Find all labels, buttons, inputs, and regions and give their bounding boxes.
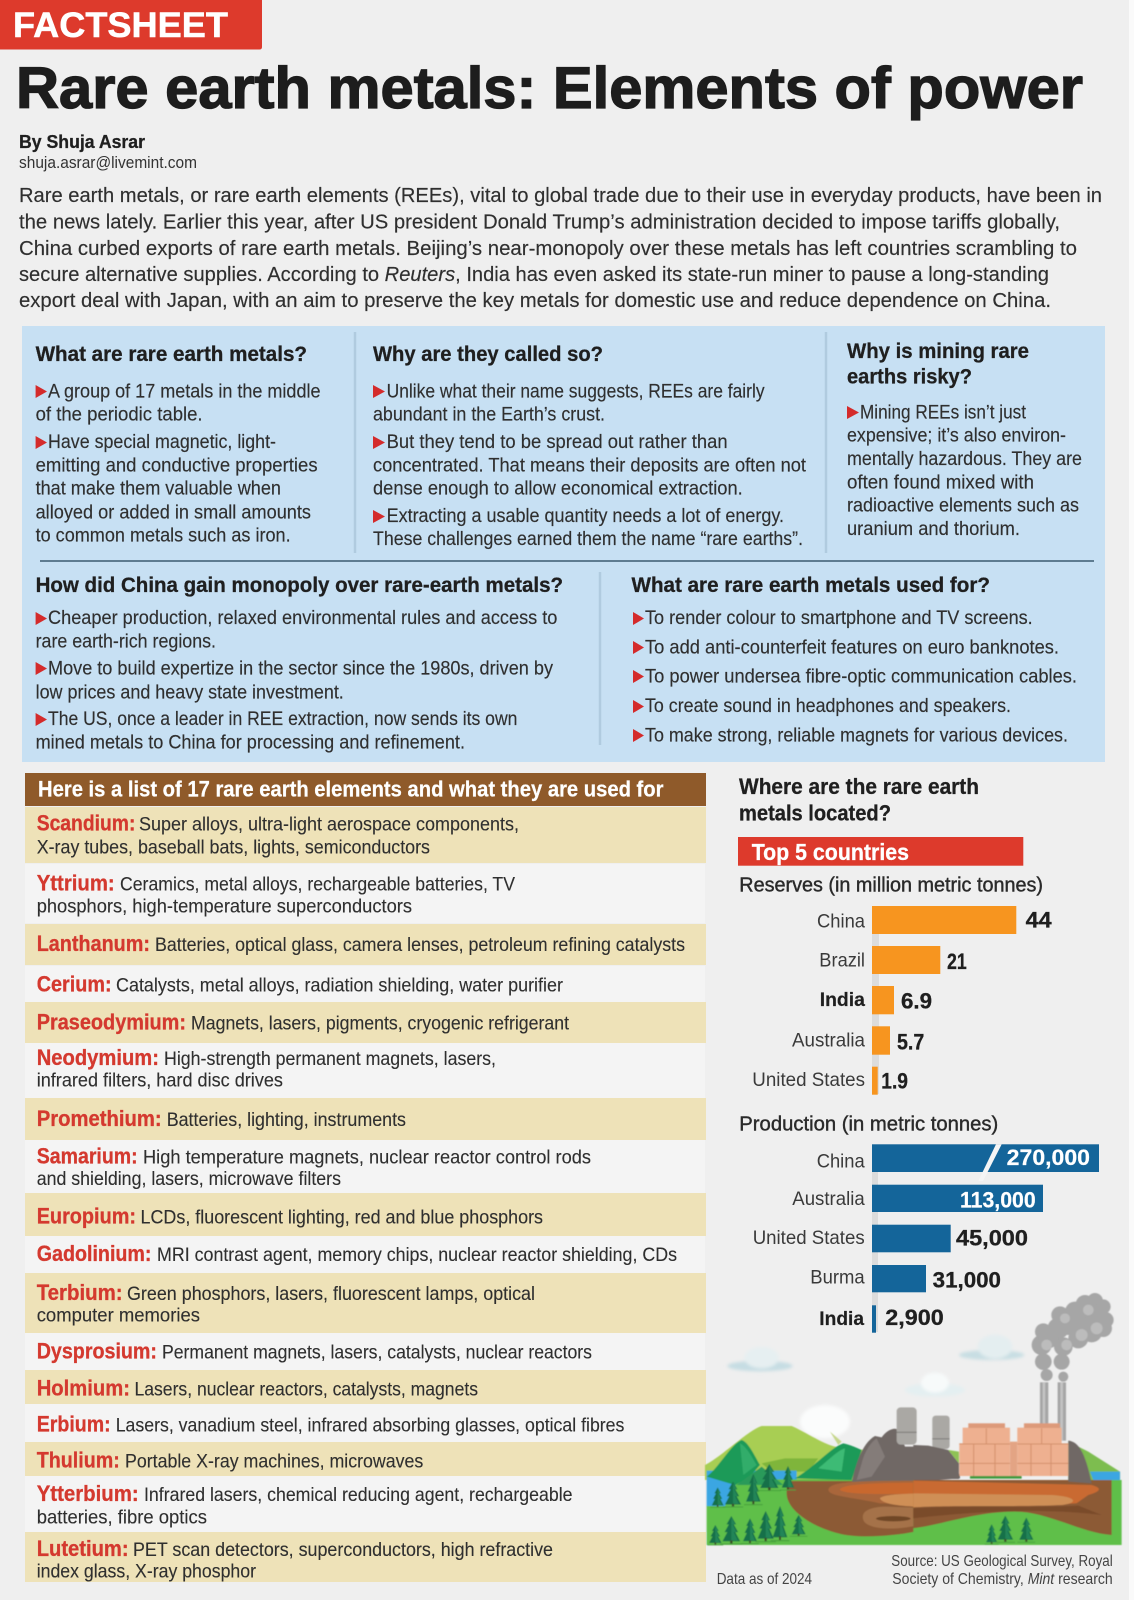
bar chart: reserves: China — [817, 910, 865, 932]
row: Lanthanum: Batteries, optical glass, camera lenses, petroleum refining catalysts — [155, 934, 685, 956]
panel: list of 17 elements — [25, 773, 706, 1583]
panel: why are they called so: dense enough to allow economical extraction. — [373, 478, 743, 500]
row: Promethium: Promethium: — [37, 1106, 162, 1131]
panel: why are they called so: Unlike what their name suggests, REEs are fairly — [387, 380, 765, 402]
bar chart: production: Australia — [792, 1188, 865, 1210]
row: Ytterbium — [25, 1476, 705, 1532]
bar chart: production: 2,900 — [885, 1305, 944, 1330]
table header: Here is a list of 17 rare earth elements and what they are used for — [38, 777, 664, 802]
bar chart: reserves: 1.9 — [881, 1068, 908, 1093]
row: Erbium: Lasers, vanadium steel, infrared absorbing glasses, optical fibres — [116, 1415, 625, 1437]
row: Europium: Europium: — [37, 1203, 136, 1228]
panel: how china gained monopoly — [36, 573, 563, 753]
heading: where are they located — [739, 774, 979, 826]
row: Cerium — [25, 966, 705, 1002]
byline: By Shuja Asrar — [19, 131, 145, 152]
panel: why are they called so: abundant in the Earth’s crust. — [373, 404, 605, 426]
row: Samarium — [25, 1140, 705, 1193]
row: Erbium — [25, 1404, 705, 1442]
silo left — [897, 1407, 917, 1445]
row: Ytterbium: Infrared lasers, chemical reducing agent, rechargeable — [144, 1484, 572, 1506]
panel: how china gained monopoly: The US, once a leader in REE extraction, now sends its own — [48, 708, 517, 730]
note: data year: Data as of 2024 — [717, 1571, 812, 1588]
panel: why is mining risky: mentally hazardous. They are — [847, 448, 1082, 470]
row: Scandium: Scandium: — [37, 811, 135, 836]
bar chart: reserves: United States — [752, 1069, 865, 1091]
row: Thulium: Thulium: — [37, 1447, 120, 1472]
row: Praseodymium — [25, 1002, 706, 1043]
row: Promethium — [25, 1098, 706, 1140]
panel: what are they used for: To create sound in headphones and speakers. — [645, 695, 1011, 717]
row: Dysprosium: Permanent magnets, lasers, catalysts, nuclear reactors — [162, 1341, 592, 1363]
bar chart: reserves — [739, 874, 1052, 1095]
row: Neodymium: High-strength permanent magnets, lasers, — [164, 1048, 496, 1070]
bar chart: reserves: Brazil — [819, 950, 865, 972]
panel: what are rare earth metals: to common metals such as iron. — [36, 525, 291, 547]
row: Gadolinium: Gadolinium: — [37, 1241, 152, 1266]
row: Terbium: computer memories — [37, 1305, 200, 1327]
panel: why is mining risky: earths risky? — [847, 364, 972, 388]
row: Gadolinium — [25, 1236, 705, 1273]
panel: what are rare earth metals: alloyed or added in small amounts — [36, 501, 311, 523]
panel: what are they used for: To render colour to smartphone and TV screens. — [645, 607, 1033, 629]
row: Dysprosium — [25, 1333, 705, 1370]
row: Gadolinium: MRI contrast agent, memory chips, nuclear reactor shielding, CDs — [157, 1244, 677, 1266]
panel: why is mining risky: Mining REEs isn’t just — [860, 401, 1026, 423]
row: Holmium: Lasers, nuclear reactors, catalysts, magnets — [134, 1379, 478, 1401]
row: Yttrium — [25, 864, 705, 923]
banner: top 5 countries: Top 5 countries — [752, 839, 909, 865]
row: Scandium — [25, 807, 706, 863]
panel: what are rare earth metals: emitting and conductive properties — [36, 454, 318, 476]
source: Society of Chemistry, Mint research — [892, 1571, 1113, 1588]
panel: how china gained monopoly: low prices and heavy state investment. — [36, 681, 344, 703]
panel: explainer questions — [22, 326, 1105, 762]
row: Neodymium: infrared filters, hard disc drives — [37, 1070, 283, 1092]
intro paragraph: the news lately. Earlier this year, after US president Donald Trump’s administration decided to impose tariffs globally, — [19, 212, 1060, 234]
left part in crop coordinates — [705, 1426, 960, 1545]
row: Terbium — [25, 1273, 706, 1333]
row: Praseodymium: Praseodymium: — [37, 1009, 186, 1034]
bar chart: production: Burma — [810, 1266, 865, 1288]
bar chart: reserves: 21 — [947, 949, 967, 974]
panel: why is mining risky: often found mixed with — [847, 471, 1034, 493]
panel: why is mining risky: uranium and thorium. — [847, 518, 1020, 540]
row: Lanthanum — [25, 924, 706, 965]
bar chart: reserves: Reserves (in million metric tonnes) — [739, 874, 1043, 897]
panel: why is mining risky: expensive; it’s also environ- — [847, 425, 1066, 447]
row: Thulium — [25, 1442, 706, 1476]
panel: why is mining risky: Why is mining rare — [847, 339, 1029, 363]
panel: what are rare earth metals — [36, 342, 320, 547]
clouds — [727, 1335, 1024, 1438]
panel: how china gained monopoly: rare earth-rich regions. — [36, 630, 216, 652]
banner: top 5 countries — [738, 837, 1023, 866]
row: Ytterbium: Ytterbium: — [37, 1481, 139, 1506]
row: Europium: LCDs, fluorescent lighting, red and blue phosphors — [140, 1206, 543, 1228]
panel: why are they called so — [373, 342, 807, 550]
panel: how china gained monopoly: Cheaper production, relaxed environmental rules and access to — [48, 607, 558, 629]
bar chart: production: 45,000 — [956, 1226, 1028, 1251]
heading: where are they located: Where are the rare earth — [739, 774, 979, 799]
quarry pit — [828, 1481, 1104, 1503]
factsheet tag: FACTSHEET — [13, 6, 228, 45]
bar chart: production: China — [817, 1150, 865, 1172]
trees left — [707, 1464, 808, 1545]
row: Holmium: Holmium: — [37, 1376, 130, 1401]
panel: why are they called so: But they tend to be spread out rather than — [387, 431, 728, 453]
intro paragraph: Rare earth metals, or rare earth elements (REEs), vital to global trade due to their use in everyday products, have been in — [19, 185, 1102, 207]
bar chart: production: Production (in metric tonnes) — [739, 1113, 998, 1136]
row: Terbium: Terbium: — [37, 1280, 123, 1305]
byline: shuja.asrar@livemint.com — [19, 154, 197, 172]
bar chart: production: India — [819, 1308, 864, 1330]
row: Samarium: High temperature magnets, nuclear reactor control rods — [143, 1146, 591, 1168]
bar chart: reserves: Australia — [792, 1030, 865, 1052]
row: Praseodymium: Magnets, lasers, pigments, cryogenic refrigerant — [191, 1012, 570, 1034]
row: Neodymium: Neodymium: — [37, 1045, 159, 1070]
row: Yttrium: Yttrium: — [37, 871, 115, 896]
bar chart: reserves: 6.9 — [901, 988, 932, 1013]
row: Yttrium: phosphors, high-temperature superconductors — [37, 896, 412, 918]
panel: what are they used for: What are rare earth metals used for? — [632, 573, 990, 597]
row: Holmium — [25, 1370, 706, 1404]
row: Erbium: Erbium: — [37, 1412, 111, 1437]
panel: what are they used for: To add anti-counterfeit features on euro banknotes. — [645, 636, 1059, 658]
panel: why are they called so: Extracting a usable quantity needs a lot of energy. — [387, 505, 784, 527]
panel: what are rare earth metals: that make them valuable when — [36, 478, 281, 500]
row: Thulium: Portable X-ray machines, microwaves — [125, 1450, 424, 1472]
panel: what are rare earth metals: A group of 17 metals in the middle — [48, 380, 320, 402]
row: Promethium: Batteries, lighting, instruments — [167, 1109, 406, 1131]
panel: what are they used for: To make strong, reliable magnets for various devices. — [645, 724, 1068, 746]
title: Rare earth metals: Elements of power — [16, 56, 1083, 121]
intro paragraph: secure alternative supplies. According to Reuters, India has even asked its state-run miner to pause a long-standing — [19, 264, 1049, 286]
row: Lutetium — [25, 1532, 706, 1583]
panel: what are rare earth metals: Have special magnetic, light- — [48, 431, 276, 453]
row: Lutetium: Lutetium: — [37, 1536, 129, 1561]
row: Terbium: Green phosphors, lasers, fluorescent lamps, optical — [127, 1283, 535, 1305]
row: Samarium: and shielding, lasers, microwave filters — [37, 1168, 341, 1190]
row: Lutetium: index glass, X-ray phosphor — [37, 1561, 256, 1583]
intro paragraph: China curbed exports of rare earth metals. Beijing’s near-monopoly over these metals has left countries scrambling to — [19, 238, 1077, 260]
row: Yttrium: Ceramics, metal alloys, rechargeable batteries, TV — [120, 874, 515, 896]
panel: why is mining risky: radioactive elements such as — [847, 495, 1079, 517]
bar chart: production: 113,000 — [960, 1187, 1036, 1212]
right part in crop coordinates — [913, 1293, 1122, 1545]
panel: what are they used for: To power undersea fibre-optic communication cables. — [645, 666, 1077, 688]
intro paragraph — [19, 185, 1102, 312]
byline — [19, 131, 197, 172]
illustration: mining landscape — [705, 1293, 1122, 1545]
row: Neodymium — [25, 1043, 705, 1098]
bar chart: reserves: 5.7 — [897, 1029, 924, 1054]
bar chart: reserves: India — [820, 989, 865, 1011]
row: Samarium: Samarium: — [37, 1143, 138, 1168]
row: Scandium: Super alloys, ultra-light aerospace components, — [139, 814, 519, 836]
landscape — [705, 1293, 1122, 1545]
panel: how china gained monopoly: Move to build expertize in the sector since the 1980s, driven by — [48, 658, 553, 680]
panel: why are they called so: These challenges earned them the name “rare earths”. — [373, 528, 803, 550]
factsheet tag — [0, 0, 262, 50]
bar chart: production — [739, 1113, 1099, 1333]
panel: why is mining risky — [847, 339, 1082, 540]
panel: why are they called so: Why are they called so? — [373, 342, 603, 366]
bar chart: reserves: 44 — [1026, 907, 1052, 932]
row: Dysprosium: Dysprosium: — [37, 1338, 157, 1363]
row: Lanthanum: Lanthanum: — [37, 931, 150, 956]
heading: where are they located: metals located? — [739, 801, 891, 826]
bar chart: production: 270,000 — [1007, 1145, 1090, 1170]
bar chart: production: 31,000 — [933, 1268, 1001, 1293]
row: Ytterbium: batteries, fibre optics — [37, 1506, 207, 1528]
panel: why are they called so: concentrated. That means their deposits are often not — [373, 454, 807, 476]
panel: how china gained monopoly: mined metals to China for processing and refinement. — [36, 731, 465, 753]
row: Cerium: Catalysts, metal alloys, radiation shielding, water purifier — [116, 975, 563, 997]
panel: what are rare earth metals: of the periodic table. — [36, 404, 203, 426]
row: Lutetium: PET scan detectors, superconductors, high refractive — [133, 1539, 553, 1561]
source — [891, 1553, 1113, 1588]
bar chart: production: United States — [753, 1227, 865, 1249]
row: Cerium: Cerium: — [37, 972, 112, 997]
row: Scandium: X-ray tubes, baseball bats, lights, semiconductors — [37, 836, 430, 858]
panel: what are rare earth metals: What are rare earth metals? — [36, 342, 307, 366]
panel: what are they used for — [632, 573, 1077, 746]
row: Europium — [25, 1193, 706, 1236]
panel: how china gained monopoly: How did China gain monopoly over rare-earth metals? — [36, 573, 563, 597]
intro paragraph: export deal with Japan, with an aim to preserve the key metals for domestic use and reduce dependence on China. — [19, 290, 1051, 312]
